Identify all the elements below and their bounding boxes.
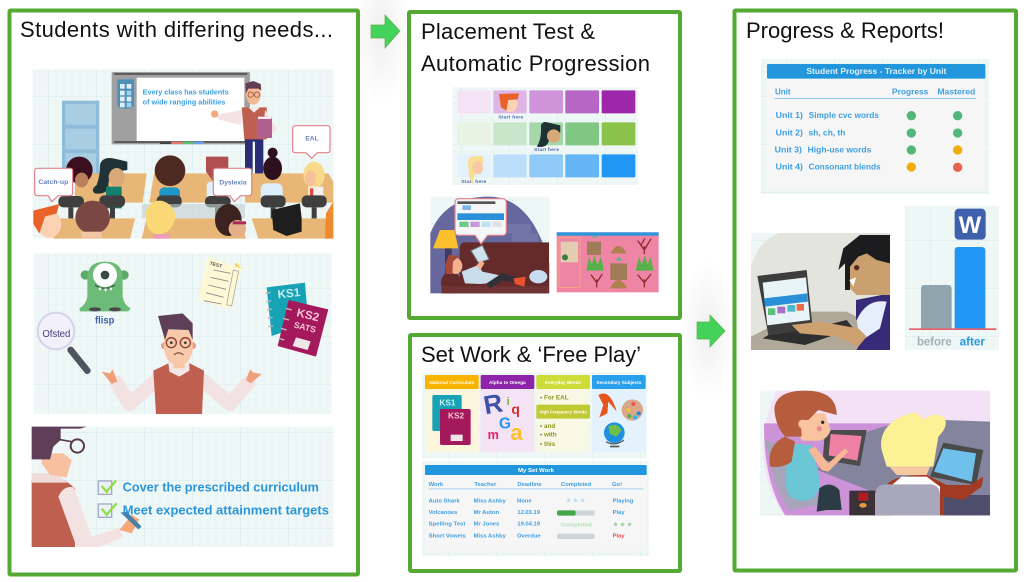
my set work table: Mr Auton xyxy=(474,510,499,516)
my set work table: Miss Ashby xyxy=(474,533,507,539)
student progress tracker table: Unit 2) xyxy=(776,128,803,137)
my set work table: Auto Shark xyxy=(429,498,461,504)
my set work table: Volcanoes xyxy=(429,510,457,516)
my set work table: 19.04.19 xyxy=(517,522,541,528)
my set work table: 12.03.19 xyxy=(517,510,541,516)
teacher xyxy=(211,81,277,175)
dark-haired student: Start here xyxy=(534,147,559,153)
my set work table: Overdue xyxy=(517,533,541,539)
chart: before and after xyxy=(905,206,999,350)
interactive whiteboard: of wide ranging abilities xyxy=(143,100,225,107)
student progress tracker table: Unit xyxy=(775,87,791,96)
work categories cards xyxy=(422,373,647,458)
card: alpha to omega: R xyxy=(481,387,505,420)
card: everyday words: Everyday Words xyxy=(545,380,581,385)
student progress tracker table: Unit 1) xyxy=(776,111,803,120)
card: alpha to omega: m xyxy=(488,428,499,442)
illustration: classroom xyxy=(33,69,333,239)
heading: students with differing needs: Students with differing needs... xyxy=(20,17,333,42)
speech bubbles xyxy=(35,126,330,202)
red-haired student xyxy=(498,93,524,121)
test paper: TEST xyxy=(209,261,223,270)
flisp monster xyxy=(79,262,131,326)
front row of desks xyxy=(53,218,328,239)
page background shading xyxy=(354,0,736,400)
speech bubbles: EAL xyxy=(305,136,319,143)
W badge: W xyxy=(959,212,982,239)
card: everyday words: • this xyxy=(540,441,556,448)
student progress tracker table: Progress xyxy=(892,87,929,96)
panel: progress and reports xyxy=(734,10,1016,570)
heading: automatic progression: Automatic Progression xyxy=(421,51,650,76)
tablet speech bubble xyxy=(455,199,506,244)
my set work table: Teacher xyxy=(474,482,497,488)
my set work table: Go! xyxy=(612,482,622,488)
checklist xyxy=(98,480,329,518)
illustration: student at laptop xyxy=(751,233,890,350)
my set work table: Work xyxy=(429,482,444,488)
speech bubbles: Catch-up xyxy=(38,179,68,186)
my set work table: Playing xyxy=(613,498,634,504)
student progress tracker table xyxy=(761,59,989,194)
blonde student xyxy=(461,156,487,185)
KS1 and KS2 SATS books: SATS xyxy=(293,320,317,335)
card: national curriculum: National Curriculum xyxy=(429,380,474,385)
reclining student xyxy=(445,245,526,288)
my set work table: Miss Ashby xyxy=(474,498,507,504)
Ofsted magnifying glass xyxy=(38,313,87,371)
checklist: Cover the prescribed curriculum xyxy=(123,480,319,495)
chairs xyxy=(58,195,327,219)
card: everyday words: High Frequency Words xyxy=(539,409,587,414)
student xyxy=(792,235,890,350)
placement level grid xyxy=(453,87,638,185)
back row of desks xyxy=(75,173,333,203)
laptop xyxy=(757,270,853,345)
panel: placement test and automatic progression xyxy=(409,12,680,318)
boy with tablet xyxy=(875,413,983,515)
arrow: to progress xyxy=(697,315,725,347)
illustration: game screen xyxy=(557,232,659,292)
student progress tracker table: sh, ch, th xyxy=(809,128,845,137)
card: alpha to omega: a xyxy=(510,420,523,445)
flisp monster: flisp xyxy=(95,315,114,326)
illustration: student on sofa with tablet xyxy=(430,197,549,293)
heading: progress and reports: Progress & Reports! xyxy=(746,18,944,43)
my set work table: Play xyxy=(613,534,625,540)
my set work table: Spelling Test xyxy=(429,522,465,528)
my set work table: Play xyxy=(613,510,625,516)
chart: before and after: after xyxy=(960,335,985,349)
card: everyday words xyxy=(536,375,590,452)
speech bubbles: Dyslexia xyxy=(219,179,247,186)
checklist: Meet expected attainment targets xyxy=(123,503,329,518)
card: secondary subjects: Secondary Subjects xyxy=(596,380,642,385)
my set work table: Deadline xyxy=(517,482,542,488)
panel: students with differing needs xyxy=(10,10,358,574)
chart: before and after: before xyxy=(917,335,952,349)
Ofsted magnifying glass: Ofsted xyxy=(42,329,70,340)
student progress tracker table: High-use words xyxy=(808,145,872,154)
my set work table: Completed xyxy=(561,522,592,528)
girl with tablet xyxy=(765,391,867,512)
card: alpha to omega: i xyxy=(507,396,510,408)
student progress tracker table: Simple cvc words xyxy=(809,111,880,120)
grass xyxy=(586,255,654,271)
illustration: curriculum checklist xyxy=(32,427,333,547)
locker xyxy=(62,101,99,174)
card: everyday words: • For EAL xyxy=(540,394,569,401)
student progress tracker table: Unit 3) xyxy=(775,145,802,154)
student progress tracker table: Mastered xyxy=(937,87,975,96)
card: national curriculum: KS2 xyxy=(448,411,465,421)
back row students xyxy=(66,148,325,210)
my set work table xyxy=(422,461,649,556)
panel: set work and free play xyxy=(410,335,680,571)
card: everyday words: • and xyxy=(540,423,555,430)
my set work table: None xyxy=(517,498,532,504)
card: alpha to omega: G xyxy=(499,415,511,432)
card: secondary subjects xyxy=(592,375,646,452)
arrow: needs to placement xyxy=(371,15,400,48)
castles xyxy=(587,235,627,280)
card: national curriculum xyxy=(425,375,479,452)
my set work table: ★★★ xyxy=(613,520,634,528)
interactive whiteboard: Every class has students xyxy=(143,90,229,97)
dark-haired student xyxy=(534,122,560,153)
KS1 and KS2 SATS books xyxy=(266,283,328,357)
interactive whiteboard xyxy=(112,72,250,144)
my set work table: Short Vowels xyxy=(429,533,466,539)
blonde student: Start here xyxy=(461,179,487,185)
my set work table: Mr Jones xyxy=(474,522,499,528)
W badge xyxy=(955,209,986,240)
illustration: children with tablets xyxy=(760,391,990,515)
coral xyxy=(591,238,651,287)
card: everyday words: • with xyxy=(540,432,557,439)
card: alpha to omega: Alpha to Omega xyxy=(489,380,526,385)
card: alpha to omega: q xyxy=(511,401,520,417)
card: national curriculum: KS1 xyxy=(439,397,456,407)
my set work table: ★★★ xyxy=(566,497,587,505)
caves xyxy=(610,246,627,288)
my set work table: My Set Work xyxy=(518,468,555,474)
card: alpha to omega xyxy=(481,375,534,452)
KS1 and KS2 SATS books: KS2 xyxy=(295,306,321,325)
student progress tracker table: Consonant blends xyxy=(809,162,881,171)
KS1 and KS2 SATS books: KS1 xyxy=(277,286,301,301)
student progress tracker table: Student Progress - Tracker by Unit xyxy=(806,67,947,76)
sleeping cat xyxy=(529,270,547,283)
heading: set work and free play: Set Work & ‘Free Play’ xyxy=(421,342,641,367)
side view teacher xyxy=(32,427,142,547)
heading: placement test: Placement Test & xyxy=(421,19,595,44)
worried teacher xyxy=(102,313,262,414)
aisle floor xyxy=(142,204,245,218)
my set work table: Completed xyxy=(561,482,592,488)
illustration: worried teacher with tests and inspections xyxy=(34,253,331,414)
student progress tracker table: Unit 4) xyxy=(776,162,803,171)
test paper xyxy=(198,257,242,309)
red-haired student: Start here xyxy=(498,115,524,121)
front row students xyxy=(33,201,333,239)
